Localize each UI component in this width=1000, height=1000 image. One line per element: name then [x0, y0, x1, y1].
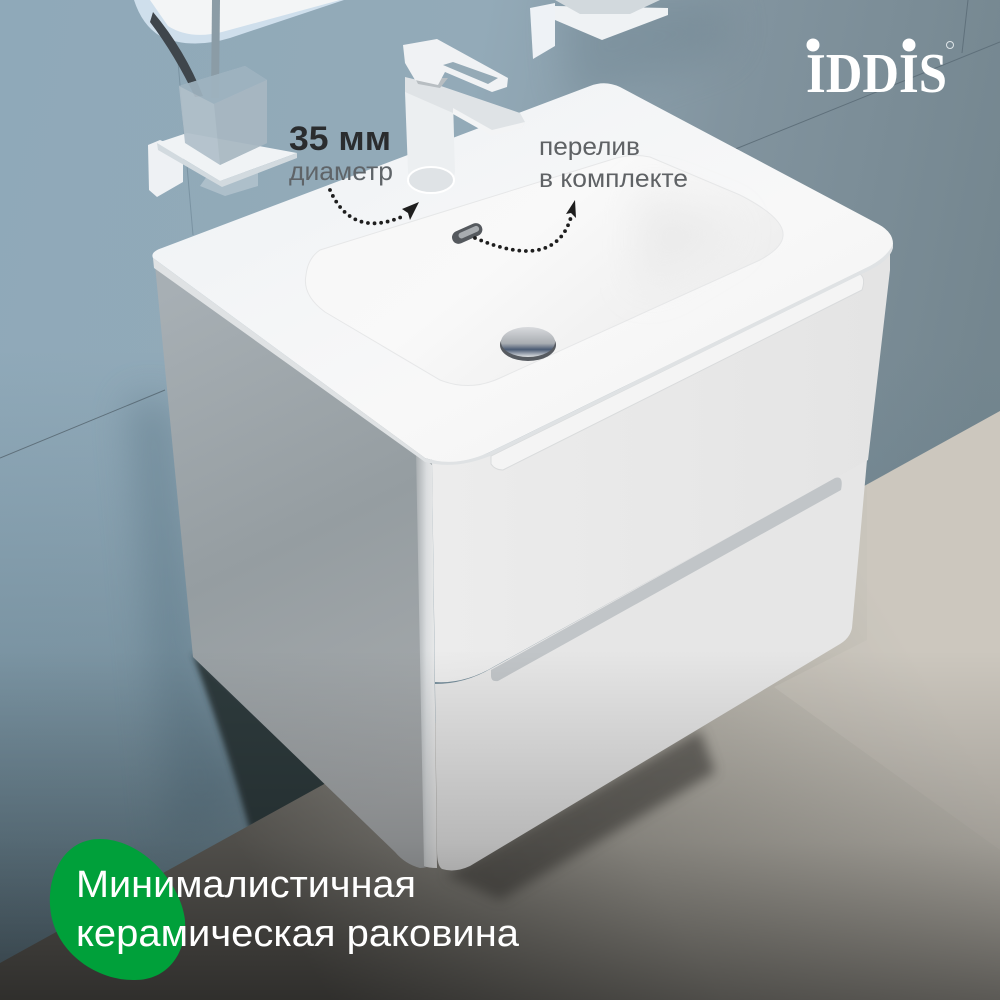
label: перелив в комплекте: в комплекте: [539, 165, 688, 193]
overflow slot: [450, 221, 484, 246]
label: 35 мм диаметр: диаметр: [289, 156, 393, 186]
caption: керамическая раковина: [76, 913, 520, 955]
cabinet lower drawer: [435, 460, 867, 870]
label: 35 мм диаметр: 35 мм: [289, 120, 391, 158]
upper drawer handle groove: [491, 274, 864, 470]
lower drawer handle groove: [491, 478, 842, 681]
floor: [0, 411, 1000, 1000]
callout ring on faucet base: [408, 167, 454, 193]
cabinet side panel: [155, 265, 436, 868]
drain: [500, 327, 556, 361]
label: 35 мм диаметр: [289, 120, 393, 186]
cabinet shadow on floor: [445, 730, 715, 900]
cabinet upper drawer: [432, 250, 890, 682]
lit floor tile: [774, 411, 1000, 850]
arrow to faucet base: [330, 190, 419, 223]
bottom dark fade: [0, 650, 1000, 1000]
arrow to overflow: [475, 200, 576, 251]
green blob: [50, 839, 185, 980]
logo: iDDiS: IDDIS: [806, 43, 947, 105]
wall shadows near cabinet: [130, 0, 730, 850]
side panel bright edge: [416, 452, 437, 868]
toothbrush holder and shelf: [134, 0, 344, 197]
caption: Минималистичная: [76, 864, 416, 906]
caption: [76, 864, 520, 955]
right shelf holder: [530, 0, 668, 59]
ceramic countertop: [152, 83, 893, 465]
faucet: [403, 39, 525, 190]
label: перелив в комплекте: [539, 133, 688, 193]
label: перелив в комплекте: перелив: [539, 133, 640, 161]
basin: [305, 156, 783, 386]
